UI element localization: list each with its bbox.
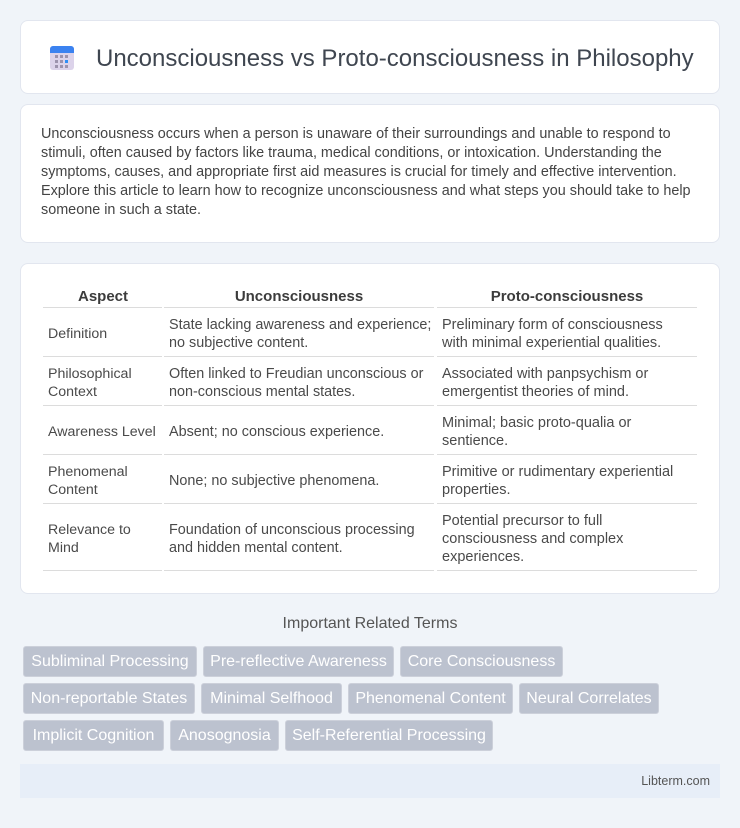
row: awareness level: Awareness Level bbox=[48, 424, 156, 440]
row: phenomenal content: properties. bbox=[442, 482, 511, 498]
related terms tags: Self-Referential Processing bbox=[292, 727, 486, 744]
related terms tags: Subliminal Processing bbox=[31, 653, 189, 670]
intro text: someone in such a state. bbox=[41, 202, 201, 218]
related terms tags: Core Consciousness bbox=[408, 653, 555, 670]
row: relevance to mind: Foundation of unconscious processing bbox=[169, 522, 415, 538]
intro text: Explore this article to learn how to recognize unconsciousness and what steps you should take to help bbox=[41, 183, 691, 199]
related terms tags: Phenomenal Content bbox=[355, 690, 506, 707]
row: relevance to mind bbox=[48, 513, 624, 565]
related terms tags: Implicit Cognition bbox=[33, 727, 154, 744]
header panel bbox=[20, 20, 720, 94]
row: relevance to mind: consciousness and complex bbox=[442, 531, 623, 547]
row: definition: with minimal experiential qualities. bbox=[442, 335, 661, 351]
row: awareness level: Absent; no conscious experience. bbox=[169, 424, 384, 440]
row: awareness level: Minimal; basic proto-qualia or bbox=[442, 415, 631, 431]
row: philosophical context: Philosophical bbox=[48, 366, 132, 382]
row: awareness level bbox=[48, 415, 632, 449]
row: phenomenal content: Primitive or rudimentary experiential bbox=[442, 464, 673, 480]
row: definition: Definition bbox=[48, 326, 107, 342]
row: phenomenal content: Content bbox=[48, 482, 98, 498]
row: definition: State lacking awareness and experience; bbox=[169, 317, 431, 333]
row: relevance to mind: Potential precursor to full bbox=[442, 513, 602, 529]
row: philosophical context: emergentist theories of mind. bbox=[442, 384, 629, 400]
row: definition: no subjective content. bbox=[169, 335, 308, 351]
table header bbox=[78, 288, 643, 305]
row: definition: Preliminary form of consciousness bbox=[442, 317, 663, 333]
row: philosophical context: Context bbox=[48, 384, 97, 400]
row: definition bbox=[48, 317, 663, 351]
related terms tags: Non-reportable States bbox=[31, 690, 187, 707]
intro text: Unconsciousness occurs when a person is unaware of their surroundings and unable to respond to bbox=[41, 126, 671, 142]
footer bar bbox=[20, 764, 720, 798]
row: philosophical context: Often linked to Freudian unconscious or bbox=[169, 366, 423, 382]
table header: Proto-consciousness bbox=[491, 288, 643, 305]
row: phenomenal content: Phenomenal bbox=[48, 464, 128, 480]
comparison table panel bbox=[20, 263, 720, 594]
intro text: stimuli, often caused by factors like trauma, medical conditions, or intoxication. Understanding the bbox=[41, 145, 662, 161]
row: awareness level: sentience. bbox=[442, 433, 508, 449]
intro text: symptoms, causes, and appropriate first aid measures is crucial for timely and effective intervention. bbox=[41, 164, 677, 180]
row: relevance to mind: experiences. bbox=[442, 549, 524, 565]
related terms tags bbox=[23, 646, 659, 751]
row: philosophical context: Associated with panpsychism or bbox=[442, 366, 648, 382]
related terms tags: Pre-reflective Awareness bbox=[210, 653, 387, 670]
row: philosophical context: non-conscious mental states. bbox=[169, 384, 355, 400]
table header: Aspect bbox=[78, 288, 128, 305]
row: relevance to mind: and hidden mental content. bbox=[169, 540, 343, 556]
title: Unconsciousness vs Proto-consciousness in Philosophy bbox=[96, 45, 694, 72]
row: phenomenal content bbox=[48, 464, 673, 498]
intro panel bbox=[20, 104, 720, 243]
footer credit: Libterm.com bbox=[641, 774, 710, 788]
intro text bbox=[41, 126, 691, 218]
related terms tags: Minimal Selfhood bbox=[210, 690, 333, 707]
icon: calendar bbox=[50, 46, 74, 70]
related terms heading: Important Related Terms bbox=[283, 615, 457, 632]
related terms tags: Anosognosia bbox=[178, 727, 271, 744]
related terms tags: Neural Correlates bbox=[526, 690, 652, 707]
table header: Unconsciousness bbox=[235, 288, 363, 305]
row: relevance to mind: Mind bbox=[48, 540, 79, 556]
row: philosophical context bbox=[48, 366, 648, 400]
row: relevance to mind: Relevance to bbox=[48, 522, 131, 538]
row: phenomenal content: None; no subjective phenomena. bbox=[169, 473, 379, 489]
